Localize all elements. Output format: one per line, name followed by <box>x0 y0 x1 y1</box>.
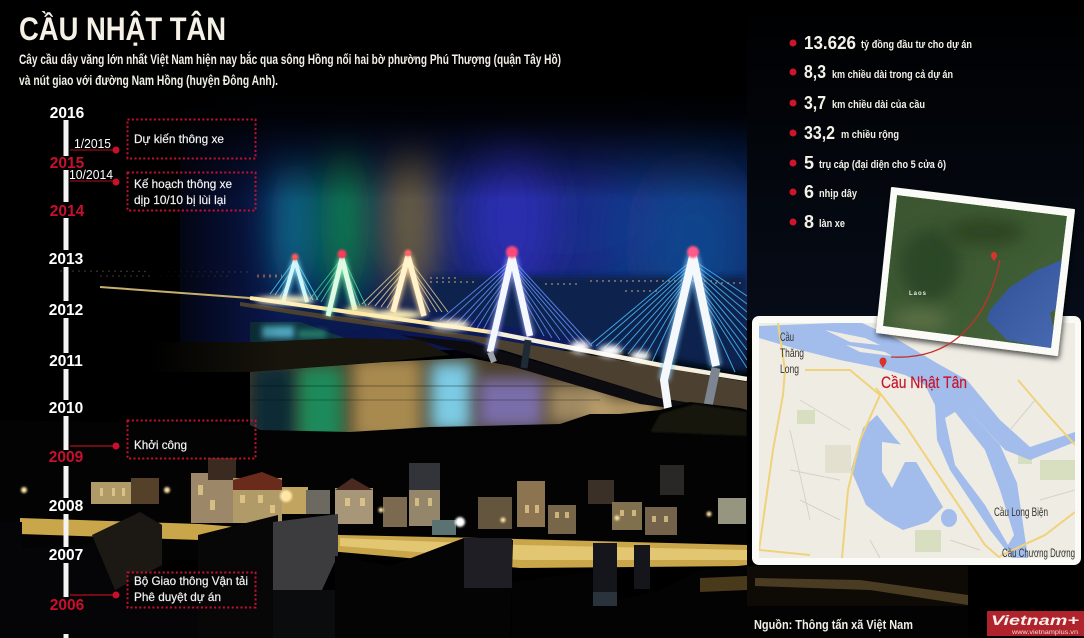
sand bank <box>180 338 450 372</box>
panel: bridge night photograph <box>0 90 765 638</box>
map pin: Nhật Tân <box>880 358 886 368</box>
map label: Cầu Thăng Long <box>780 330 804 376</box>
bridge cables <box>270 262 747 372</box>
tower 5 <box>664 246 716 408</box>
water haze below horizon <box>430 276 747 372</box>
West Lake <box>851 415 943 530</box>
event: 10/2014: dịp 10/10 bị lùi lại <box>134 193 226 207</box>
deck lights <box>255 296 650 361</box>
bridge tower glow <box>283 256 716 380</box>
stat: bridge length: km chiều dài của cầu <box>832 99 925 111</box>
stat: width: m chiều rộng <box>841 129 899 141</box>
map parks <box>797 410 1075 552</box>
stat: width <box>790 123 899 143</box>
panel: Hanoi street map card <box>752 316 1081 565</box>
event: 2009: Khởi công <box>134 438 187 452</box>
event: 1/2015 <box>70 120 256 158</box>
panel: lower right dim road strip <box>747 566 968 638</box>
tower 2 <box>328 250 355 316</box>
timeline years: 2012 <box>49 302 83 319</box>
map label: Cầu Thăng Long: Thăng <box>780 346 804 360</box>
stat: investment <box>790 33 972 53</box>
dim road at the lower right <box>700 576 747 592</box>
subtitle text block: và nút giao với đường Nam Hồng (huyện Đông Anh). <box>19 73 278 88</box>
lit road <box>20 518 747 568</box>
event: 10/2014: Kế hoạch thông xe <box>134 177 232 191</box>
street lamps <box>21 487 712 527</box>
stat: spans: 6 <box>804 182 814 202</box>
stat: bridge length: 3,7 <box>804 93 826 113</box>
stat: lanes: 8 <box>804 212 814 232</box>
timeline years: 2009 <box>49 449 84 466</box>
key figures list <box>790 33 972 232</box>
stat: pylons: 5 <box>804 153 814 173</box>
cables: tower 1 <box>270 264 318 300</box>
timeline years: 2011 <box>49 353 83 370</box>
stat: spans: nhịp dây <box>819 188 858 200</box>
timeline years: 2008 <box>49 498 84 515</box>
connector arc from map to satellite <box>891 260 1000 357</box>
panel: regional satellite map <box>877 188 1074 355</box>
map label: Cầu Long Biện: Cầu Long Biện <box>994 505 1048 519</box>
subtitle text block <box>19 52 561 88</box>
timeline years: 2010 <box>49 400 83 417</box>
event: 2006: Bộ Giao thông Vận tải <box>134 574 248 588</box>
timeline years: 2014 <box>50 203 85 220</box>
land <box>883 195 1067 348</box>
panel: right dark column <box>747 0 1084 320</box>
far town lights on the horizon <box>60 271 745 291</box>
timeline years: 2015 <box>50 155 85 172</box>
tree line silhouette <box>250 402 747 440</box>
cables: tower 3 <box>362 262 448 312</box>
cables: tower 4 <box>440 262 592 346</box>
event: 1/2015: Dự kiến thông xe <box>134 132 224 146</box>
timeline years: 2006 <box>50 597 85 614</box>
map label: Cầu Thăng Long: Long <box>780 362 799 376</box>
stat: width: 33,2 <box>804 123 835 143</box>
map roads <box>759 323 1075 558</box>
event: 2006: Phê duyệt dự án <box>134 590 221 604</box>
logo: Vietnam+: www.vietnamplus.vn <box>1011 630 1078 636</box>
cables: tower 2 <box>310 262 366 306</box>
timeline <box>49 105 256 638</box>
tower 1 <box>283 254 307 302</box>
stat: pylons: trụ cáp (đại diện cho 5 cửa ô) <box>819 159 946 171</box>
stat: lanes <box>790 212 845 232</box>
event: 10/2014 <box>69 168 256 210</box>
road highlights <box>340 538 747 560</box>
small lake <box>941 509 957 527</box>
bridge deck <box>100 287 747 379</box>
stat: pylons <box>790 153 946 173</box>
stat: project length <box>790 62 953 82</box>
river islands <box>825 330 1014 545</box>
logo: Vietnam+ <box>987 611 1084 636</box>
map label: Cầu Nhật Tân: Cầu Nhật Tân <box>881 373 967 392</box>
map label: Cầu Thăng Long: Cầu <box>780 330 794 344</box>
stat: investment: tỷ đồng đầu tư cho dự án <box>861 39 972 51</box>
houses along the road <box>91 458 746 535</box>
sky glow <box>180 90 765 372</box>
event: 2006 <box>70 572 256 608</box>
tower 3 <box>393 250 424 316</box>
stat: lanes: làn xe <box>819 218 845 230</box>
source note: Nguồn: Thông tấn xã Việt Nam <box>754 618 913 632</box>
stat: spans <box>790 182 858 202</box>
title: CẦU NHẬT TÂN <box>19 11 226 47</box>
lake peninsula <box>882 442 916 488</box>
event: 10/2014: 10/2014 <box>69 168 113 182</box>
map base <box>759 323 1075 558</box>
event: 1/2015: 1/2015 <box>74 137 111 151</box>
trees at right edge <box>650 404 747 436</box>
upper river water <box>250 322 345 342</box>
lower river with coloured reflections <box>250 358 668 432</box>
bridge underside and shadow <box>240 302 747 412</box>
tower 4 <box>490 246 530 368</box>
house windows <box>100 485 668 522</box>
stat: investment: 13.626 <box>804 33 856 53</box>
cables: tower 5 <box>590 262 747 372</box>
stat: bridge length <box>790 93 925 113</box>
Red River <box>759 322 1075 558</box>
map pin: Hanoi <box>991 252 997 261</box>
subtitle text block: Cây cầu dây văng lớn nhất Việt Nam hiện nay bắc qua sông Hồng nối hai bờ phường Phú Thượng (quận Tây Hồ) <box>19 52 561 67</box>
timeline years: 2016 <box>50 105 85 122</box>
foreground buildings silhouette <box>0 510 747 638</box>
bridge towers <box>283 246 716 408</box>
map minor streets <box>790 400 1075 558</box>
timeline years <box>49 105 85 614</box>
stat: project length: 8,3 <box>804 62 826 82</box>
Gulf of Tonkin <box>987 258 1068 350</box>
darker highlands <box>900 229 960 301</box>
fade of sky to black <box>150 90 750 375</box>
stat: project length: km chiều dài trong cả dự án <box>832 69 953 81</box>
event: 2009 <box>70 420 256 458</box>
timeline years: 2007 <box>49 547 83 564</box>
logo: Vietnam+: Vietnam+ <box>991 612 1079 628</box>
label: Laos: Laos <box>909 291 927 297</box>
timeline axis <box>64 120 68 638</box>
timeline years: 2013 <box>49 251 84 268</box>
